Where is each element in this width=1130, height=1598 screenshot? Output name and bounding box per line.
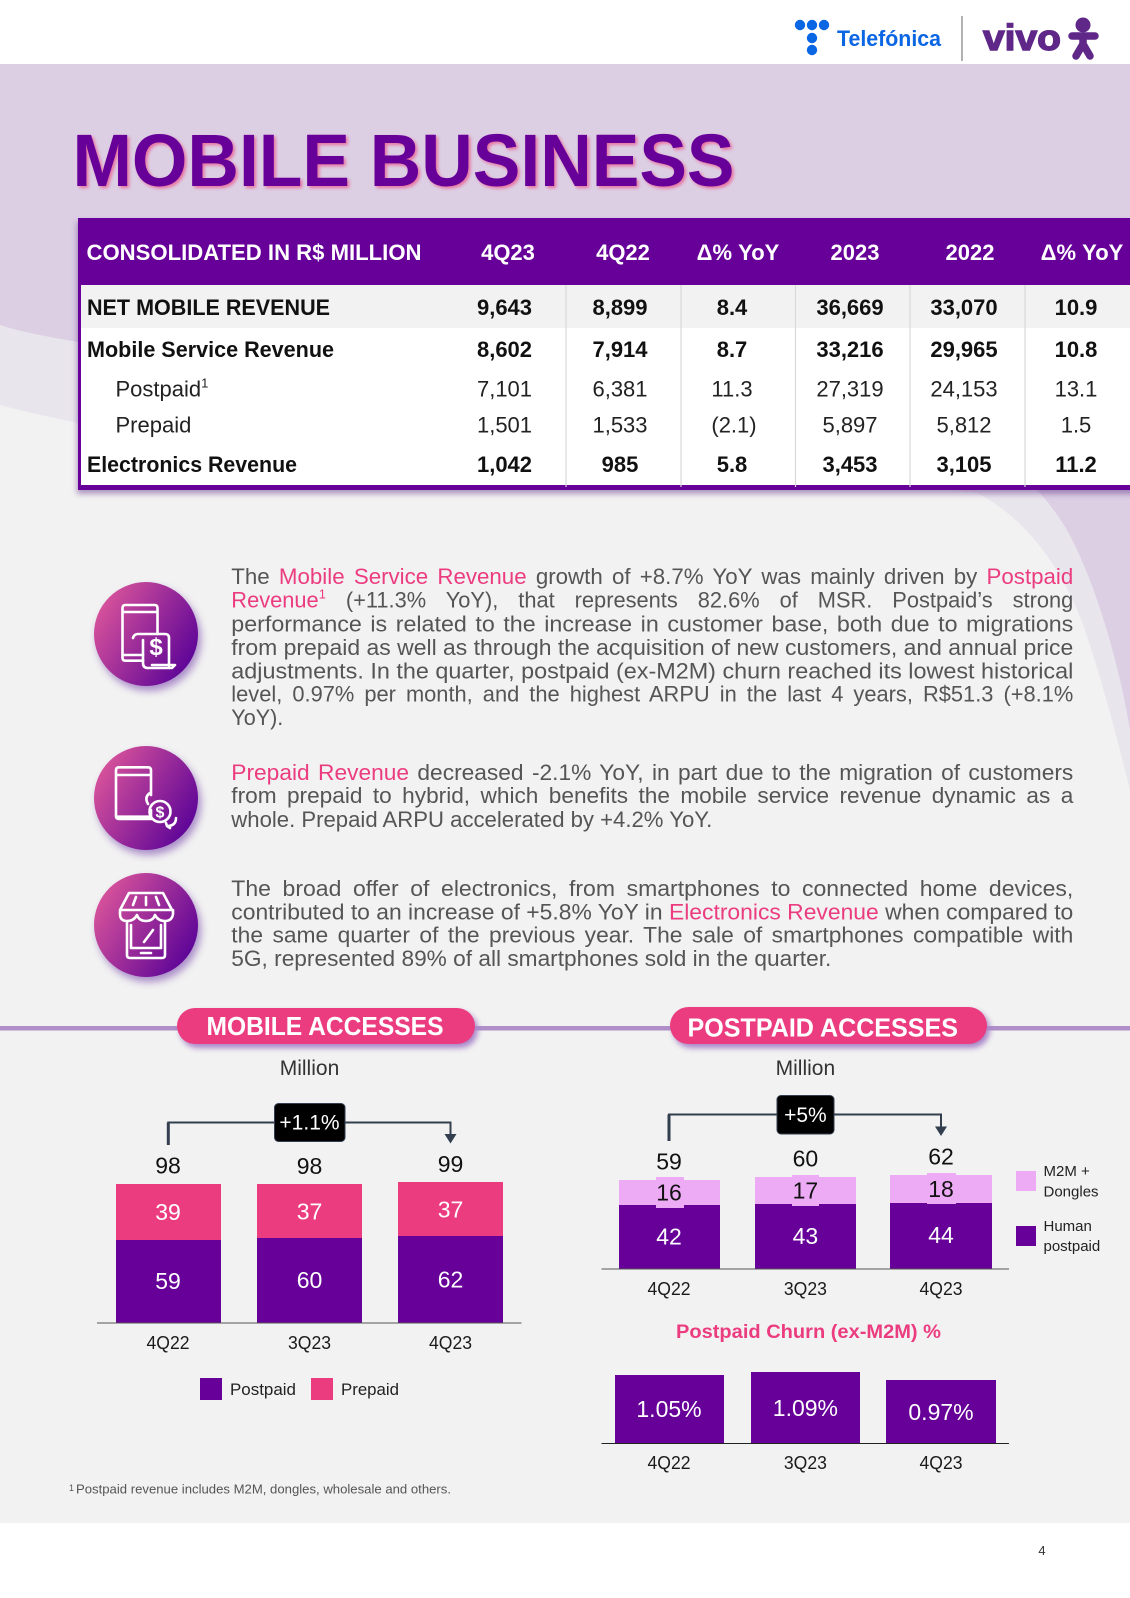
text: electronics revenue [231,876,1073,971]
footnote: 1 [69,1483,74,1493]
bar 4Q22: 4Q22 [648,1453,690,1473]
bars 4Q22: 39 [155,1199,181,1225]
text: mobile service revenue [231,564,1073,730]
bars 3Q23: 60 [297,1267,322,1293]
row: prepaid: Prepaid [116,412,191,438]
row: prepaid [116,412,1091,438]
chart: postpaid churn [602,1322,1009,1473]
bar 3Q23 [751,1372,860,1473]
row: prepaid: (2.1) [711,412,757,438]
row: mobile service revenue: 8.7 [717,337,747,362]
row: electronics revenue: 1,042 [477,452,532,477]
bars 4Q22 [619,1148,720,1299]
icon: phone with receipt [94,582,198,686]
table: consolidated [78,218,1130,490]
row: postpaid: 13.1 [1055,376,1097,402]
table header row [86,240,1124,265]
text: electronics revenue: 5G, represented 89% of all smartphones sold in the quarter. [231,946,831,971]
legend [200,1378,399,1400]
table header row: 2023 [831,240,879,265]
header logos [795,16,1095,61]
row: postpaid: 6,381 [592,376,648,402]
bars 4Q22: 59 [656,1148,682,1174]
row: electronics revenue: 3,105 [936,452,992,477]
legend: Prepaid [341,1380,399,1399]
bar 4Q22: 1.05% [636,1396,702,1422]
bar 3Q23: 3Q23 [784,1453,827,1473]
bars 4Q23: 62 [438,1266,463,1292]
bars 4Q22: 4Q22 [648,1279,690,1299]
bars 4Q23: 4Q23 [920,1279,962,1299]
legend: postpaid [1044,1238,1100,1255]
table header row: 4Q22 [596,240,650,265]
row: prepaid: 1,533 [592,412,648,438]
footnote: Postpaid revenue includes M2M, dongles, wholesale and others. [76,1482,451,1496]
logo: vivo [983,17,1095,58]
text: mobile service revenue: YoY). [231,705,283,730]
bars 4Q22: 4Q22 [146,1333,190,1353]
text: mobile service revenue: adjustments. In the quarter, postpaid (ex-M2M) churn reached its lowest historical [231,658,1073,683]
bars 4Q23: 44 [928,1222,954,1248]
row: electronics revenue: 985 [602,452,638,477]
bars 4Q23: 37 [438,1196,463,1222]
logo: vivo: vivo [983,17,1061,58]
bars 3Q23: 3Q23 [784,1279,827,1299]
row: net mobile revenue: 36,669 [816,295,884,320]
legend: Human [1044,1218,1092,1235]
bars 4Q23: 99 [438,1151,463,1177]
bars 4Q22 [116,1152,221,1353]
legend [1016,1163,1100,1255]
text: mobile service revenue: performance is related to the increase in customer base, both due to migrations [231,611,1073,636]
row: mobile service revenue: 10.8 [1055,337,1097,362]
text: mobile service revenue: from prepaid as well as through the acquisition of new customers, and annual price [231,635,1073,660]
row: net mobile revenue: 8.4 [717,295,748,320]
text: mobile service revenue: 1 [319,587,326,602]
bars 4Q23 [398,1151,503,1353]
row: postpaid: 1 [201,376,208,390]
logo: Telefonica: Telefónica [837,26,942,51]
row: electronics revenue: 3,453 [822,452,878,477]
text: prepaid revenue [230,760,1074,832]
text: mobile service revenue: level, 0.97% per month, and the highest ARPU in the last 4 years, R$51.3 (+8.1% [231,682,1073,707]
table header row: Δ% YoY [697,240,780,265]
row: net mobile revenue: NET MOBILE REVENUE [87,295,330,320]
table header row: 4Q23 [481,240,535,265]
bars 4Q23: 62 [928,1144,954,1170]
row: net mobile revenue: 8,899 [592,295,648,320]
bars 4Q22: 98 [155,1152,181,1178]
icon: shop with phone [94,873,198,977]
bars 3Q23 [755,1146,856,1299]
logo: Telefonica [795,20,942,55]
text: electronics revenue: The broad offer of electronics, from smartphones to connected home devices, [231,876,1073,901]
legend: Postpaid [230,1380,296,1399]
text: electronics revenue: contributed to an increase of +5.8% YoY in Electronics Revenue when compared to [231,899,1073,924]
bar 3Q23: 1.09% [773,1395,838,1421]
row: electronics revenue: 5.8 [717,452,747,477]
table header row: CONSOLIDATED IN R$ MILLION [86,240,422,265]
text: prepaid revenue: whole. Prepaid ARPU accelerated by +4.2% YoY. [230,807,712,832]
text: mobile service revenue: Revenue [231,588,319,613]
heading: mobile accesses: MOBILE ACCESSES [206,1011,444,1041]
icon: phone with coin: $ [156,804,165,822]
legend: M2M + [1044,1163,1090,1180]
row: net mobile revenue: 9,643 [477,295,532,320]
row: mobile service revenue: 7,914 [592,337,648,362]
row: prepaid: 1,501 [477,412,532,438]
row: mobile service revenue [87,337,1097,362]
row: net mobile revenue [87,295,1097,320]
churn title: Postpaid Churn (ex-M2M) % [676,1322,941,1343]
row: postpaid: 7,101 [477,376,532,402]
chart: mobile accesses [97,1057,522,1400]
row: mobile service revenue: Mobile Service Revenue [87,337,334,362]
legend: Dongles [1044,1184,1099,1200]
icon: phone with coin [94,746,198,850]
bars 4Q23 [890,1144,992,1299]
bars 3Q23: 60 [793,1146,818,1172]
row: mobile service revenue: 33,216 [816,337,884,362]
row: net mobile revenue: 10.9 [1055,295,1097,320]
bars 3Q23: 17 [793,1178,818,1204]
bars 3Q23: 37 [297,1198,322,1224]
row: electronics revenue [87,452,1097,477]
table header row: 2022 [946,240,994,265]
bar 4Q23: 0.97% [908,1399,974,1425]
bar 4Q22 [615,1375,724,1473]
text: mobile service revenue: The Mobile Service Revenue growth of +8.7% YoY was mainly driven by Postpaid [231,564,1073,589]
title: MOBILE BUSINESS [72,119,734,202]
row: electronics revenue: Electronics Revenue [87,452,297,477]
chart: postpaid accesses [602,1057,1100,1299]
bar 4Q23: 4Q23 [920,1453,962,1473]
bars 4Q23: 18 [928,1176,954,1202]
table header row: Δ% YoY [1041,240,1124,265]
bars 4Q22: 16 [656,1180,682,1206]
row: postpaid: 24,153 [930,376,998,402]
bars 3Q23: 43 [793,1223,818,1249]
chart: mobile accesses: Million [280,1057,339,1080]
bars 4Q23: 4Q23 [429,1333,472,1353]
text: prepaid revenue: from prepaid to hybrid, which benefits the mobile service revenue dynamic as a [231,783,1074,808]
row: postpaid [116,376,1097,402]
page number: 4 [1038,1543,1046,1558]
text: prepaid revenue: Prepaid Revenue decreased -2.1% YoY, in part due to the migration of customers [231,760,1073,785]
row: postpaid: 27,319 [816,376,884,402]
row: net mobile revenue: 33,070 [930,295,998,320]
bars 4Q22: 59 [155,1268,181,1294]
text: electronics revenue: the same quarter of the previous year. The sale of smartphones compatible with [231,922,1073,947]
row: mobile service revenue: 29,965 [930,337,998,362]
row: postpaid: Postpaid [116,376,201,402]
bars 4Q22: 42 [656,1224,682,1250]
growth arrow: +1.1%: +1.1% [279,1112,340,1134]
row: postpaid: 11.3 [711,376,753,402]
chart: postpaid accesses: Million [776,1057,835,1080]
row: prepaid: 1.5 [1061,412,1091,438]
row: prepaid: 5,812 [936,412,992,438]
growth arrow: +5%: +5% [784,1104,827,1127]
growth arrow: +1.1% [168,1104,457,1145]
bar 4Q23 [886,1380,996,1473]
text: mobile service revenue: (+11.3% YoY), that represents 82.6% of MSR. Postpaid’s strong [326,588,1073,613]
bars 3Q23 [257,1153,362,1353]
bars 3Q23: 98 [297,1153,322,1179]
growth arrow: +5% [669,1096,947,1141]
row: electronics revenue: 11.2 [1055,452,1097,477]
row: mobile service revenue: 8,602 [477,337,532,362]
bars 3Q23: 3Q23 [288,1333,331,1353]
row: prepaid: 5,897 [822,412,878,438]
heading: postpaid accesses: POSTPAID ACCESSES [688,1012,958,1042]
icon: phone with receipt: $ [149,634,163,661]
